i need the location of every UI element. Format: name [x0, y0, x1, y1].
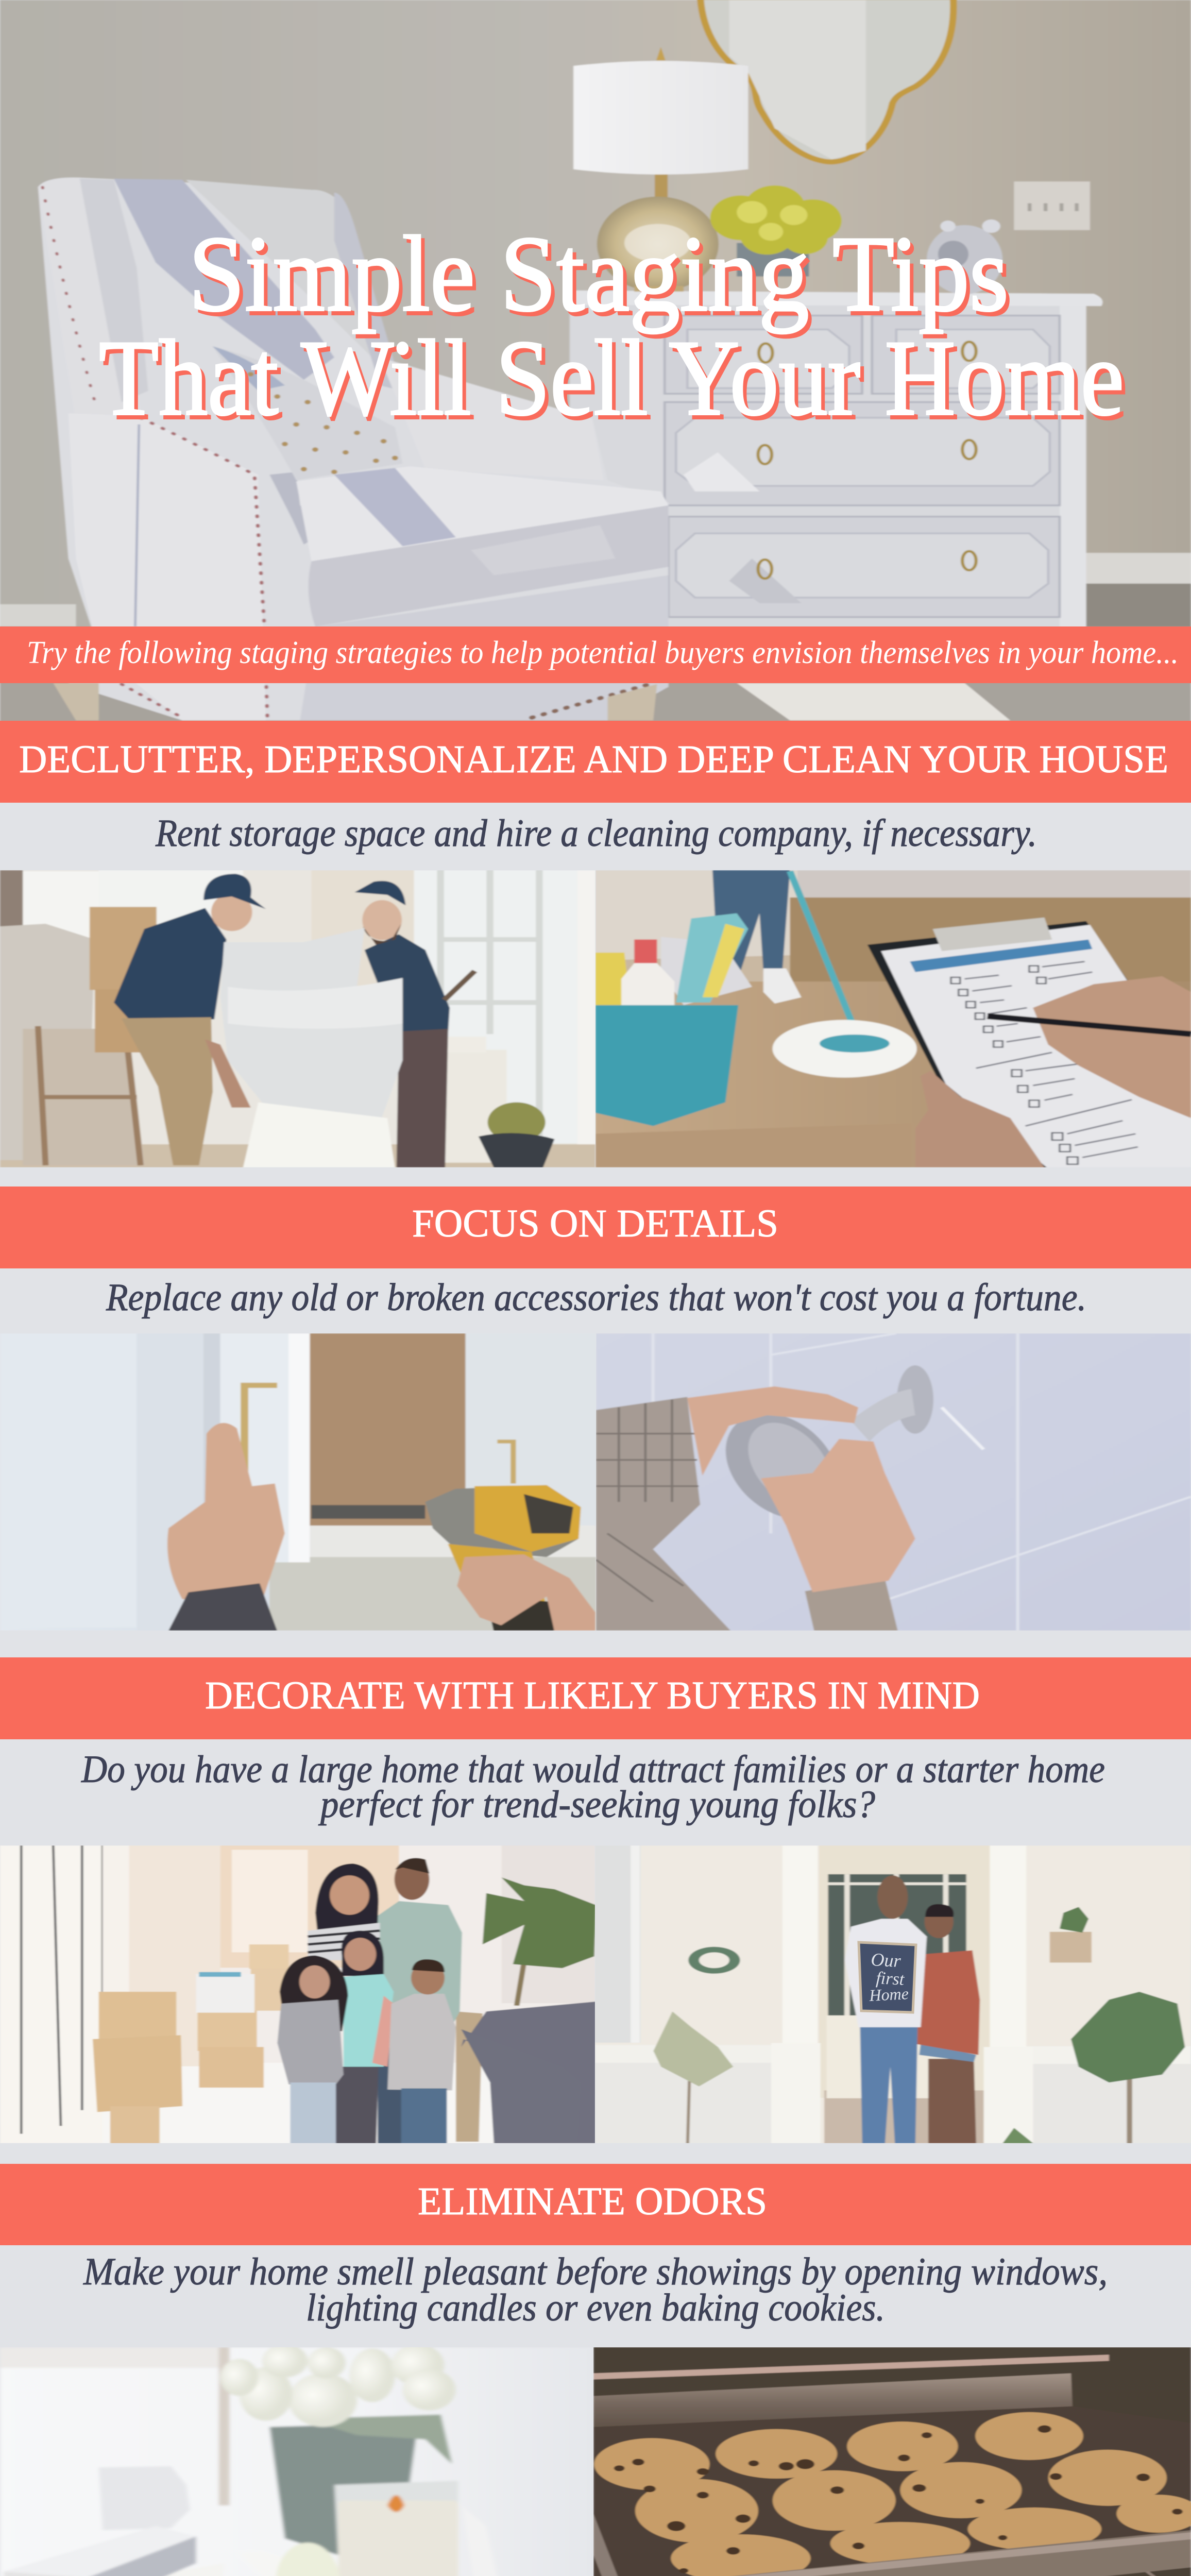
blurred mug	[99, 2466, 190, 2530]
chalkboard sign: Our	[871, 1949, 902, 1971]
text: decorate tip	[81, 1748, 1105, 1826]
text: details tip: Replace any old or broken accessories that won't cost you a fortune.	[106, 1276, 1086, 1319]
boxes	[93, 1944, 293, 2143]
sleeves	[596, 1397, 730, 1631]
mother	[308, 1863, 380, 1960]
oven tray back	[593, 2374, 1073, 2435]
hands	[915, 1071, 1044, 1167]
skirting and carpet	[0, 553, 1191, 722]
photo: cleaning checklist and mop	[596, 870, 1191, 1167]
chocolate chips	[614, 2426, 1183, 2573]
son	[387, 1959, 456, 2143]
heading: eliminate odors	[0, 2164, 1191, 2245]
cabinet door	[203, 1333, 310, 1562]
woman	[928, 2059, 976, 2143]
roses	[220, 2344, 456, 2555]
topiary tree	[1128, 2078, 1131, 2143]
photo: family with moving boxes	[0, 1845, 595, 2143]
photo: cookies baking in oven	[593, 2347, 1191, 2576]
photo: drill on cabinet door	[2, 1333, 596, 1631]
sofa	[461, 2002, 596, 2143]
man	[860, 2023, 917, 2143]
houseplant	[483, 1877, 596, 2006]
cabinet interior	[310, 1333, 465, 1527]
text: odors tip: lighting candles or even baking cookies.	[306, 2286, 885, 2329]
photo: movers with wrapped furniture	[0, 870, 596, 1167]
title: Simple Staging Tips	[189, 214, 1009, 334]
books	[0, 2563, 224, 2576]
photo: candle and white roses	[0, 2347, 520, 2576]
hero photo: armchair and dresser	[0, 0, 1191, 721]
small tree	[688, 2063, 690, 2143]
door and window	[819, 1845, 990, 2098]
icon: dresser	[570, 291, 1102, 628]
text: odors tip	[83, 2250, 1108, 2329]
candle	[334, 2481, 458, 2576]
rose	[276, 2543, 339, 2576]
icon: silver piggy bank	[927, 219, 1002, 294]
text: declutter tip: Rent storage space and hire a cleaning company, if necessary.	[155, 812, 1037, 855]
heading text: ELIMINATE ODORS	[418, 2180, 767, 2223]
columns	[782, 1845, 818, 2046]
first mover	[114, 908, 226, 1020]
icon: armchair	[38, 178, 669, 720]
second mover	[365, 934, 450, 1037]
heading: focus on details	[0, 1187, 1191, 1268]
left hand	[167, 1423, 285, 1602]
bucket with bottles	[596, 953, 631, 1005]
mop head	[773, 1020, 917, 1078]
intro banner	[0, 626, 1191, 683]
heading text: DECLUTTER, DEPERSONALIZE AND DEEP CLEAN YOUR HOUSE	[19, 738, 1168, 781]
wall shelf with plant	[1050, 1932, 1092, 1962]
icon: gold mirror	[700, 0, 954, 162]
chalkboard sign: first	[876, 1969, 906, 1989]
drill	[311, 1505, 425, 1519]
shower arm	[897, 1365, 933, 1434]
daughter, right	[336, 1930, 394, 2143]
hands	[687, 1386, 858, 1476]
furniture wrap	[0, 924, 95, 1160]
shower head	[704, 1402, 860, 1531]
pan front edge	[593, 2530, 1191, 2576]
text: decorate tip: perfect for trend-seeking young folks?	[318, 1783, 875, 1826]
icon: table lamp	[573, 47, 748, 292]
chalkboard sign	[859, 1942, 916, 2012]
cactus	[488, 1103, 546, 1142]
father	[376, 1858, 462, 2143]
tray	[240, 2551, 524, 2576]
wrapped chair	[220, 928, 402, 1167]
oven rack	[593, 2571, 1191, 2576]
chalkboard sign: Home	[868, 1984, 909, 2005]
daughter, left	[277, 1956, 348, 2143]
heading text: FOCUS ON DETAILS	[412, 1202, 778, 1245]
heading: decorate with likely buyers in mind	[0, 1657, 1191, 1739]
legs	[712, 870, 790, 971]
clipboard	[867, 921, 1191, 1167]
heading text: DECORATE WITH LIKELY BUYERS IN MIND	[205, 1674, 980, 1717]
heading: declutter	[0, 721, 1191, 803]
text: decorate tip: Do you have a large home that would attract families or a starter home	[81, 1748, 1105, 1791]
text: odors tip: Make your home smell pleasant before showings by opening windows,	[83, 2250, 1108, 2293]
icon: yellow flowers	[710, 185, 842, 277]
photo: couple on porch of first home	[595, 1845, 1191, 2143]
photo: shower head repair	[596, 1333, 1191, 1631]
cookies	[594, 2412, 1191, 2576]
icon: dotted cushion	[213, 346, 402, 480]
icon: light switch plate	[1014, 181, 1090, 230]
title	[99, 214, 1124, 438]
icon: wreath	[694, 1950, 735, 1971]
